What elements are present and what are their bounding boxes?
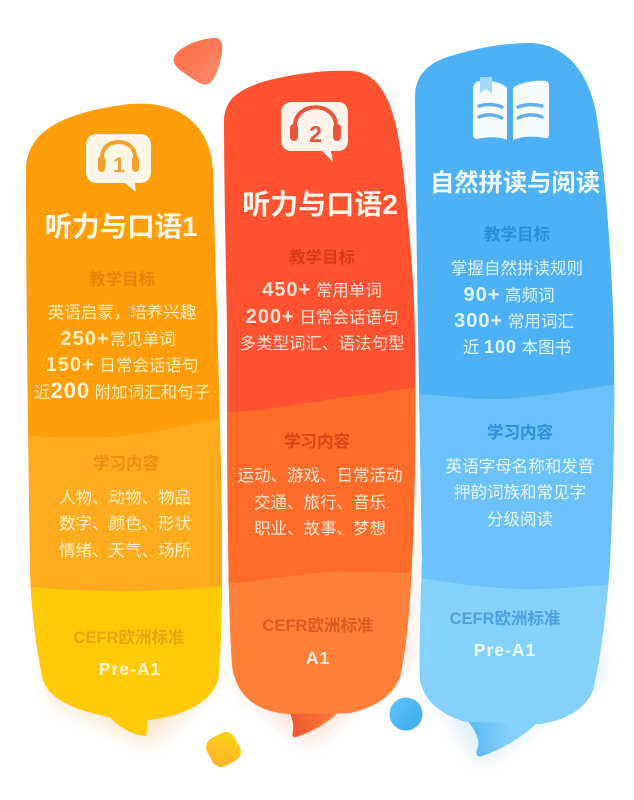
heading: CEFR standard: CEFR欧洲标准	[450, 608, 560, 628]
text block: learning content: 情绪、天气、场所	[59, 541, 191, 560]
text block: teaching goals: 450+ 常用单词	[262, 279, 382, 301]
level: Pre-A1: Pre-A1	[474, 640, 536, 660]
heading: teaching goals: 教学目标	[89, 269, 156, 289]
text block: learning content: 人物、动物、物品	[59, 488, 191, 507]
text block: teaching goals	[240, 279, 404, 353]
title: phonics and reading: 自然拼读与阅读	[430, 170, 600, 197]
heading: CEFR standard: CEFR欧洲标准	[74, 627, 184, 647]
icon: headphones 1	[86, 134, 151, 192]
panel: listening and speaking 2	[224, 70, 416, 748]
text block: teaching goals: 300+ 常用词汇	[454, 310, 574, 332]
text block: teaching goals: 近 100 本图书	[463, 337, 571, 357]
decoration: yellow rounded square	[203, 729, 244, 770]
text block: teaching goals: 近200 附加词汇和句子	[34, 378, 210, 403]
heading: CEFR standard: CEFR欧洲标准	[263, 615, 373, 635]
level: A1: A1	[306, 648, 330, 668]
heading: learning content: 学习内容	[284, 431, 350, 451]
speech bubble tail	[289, 710, 340, 737]
text block: learning content: 押韵词族和常见字	[454, 483, 586, 502]
text block: learning content: 数字、颜色、形状	[59, 514, 192, 533]
text block: teaching goals: 英语启蒙，培养兴趣	[48, 303, 196, 322]
text block: teaching goals: 200+ 日常会话语句	[246, 306, 398, 328]
text block: teaching goals: 多类型词汇、语法句型	[240, 334, 404, 353]
text block: teaching goals: 250+常见单词	[60, 328, 176, 350]
text block: learning content: 交通、旅行、音乐	[254, 493, 386, 512]
text block: teaching goals	[451, 259, 583, 357]
heading: teaching goals: 教学目标	[484, 224, 550, 244]
text block: teaching goals: 150+ 日常会话语句	[46, 354, 198, 376]
text block: learning content	[238, 466, 402, 538]
icon: open book	[473, 77, 549, 140]
speech bubble tail	[465, 718, 542, 756]
text block: learning content: 职业、故事、梦想	[254, 519, 386, 538]
decoration: coral teardrop	[174, 38, 222, 85]
text block: teaching goals	[34, 303, 210, 403]
text block: learning content: 分级阅读	[487, 510, 553, 529]
heading: teaching goals: 教学目标	[289, 247, 356, 267]
icon: headphones 2: 2	[309, 121, 322, 147]
level: Pre-A1: Pre-A1	[99, 659, 161, 679]
icon: headphones 2	[281, 102, 348, 162]
icon: headphones 1: 1	[113, 154, 125, 177]
text block: learning content	[446, 457, 594, 529]
title: listening and speaking 1: 听力与口语1	[45, 211, 197, 242]
heading: learning content: 学习内容	[487, 422, 554, 442]
text block: learning content: 运动、游戏、日常活动	[238, 466, 402, 485]
text block: learning content	[59, 488, 192, 560]
heading: learning content: 学习内容	[93, 453, 160, 473]
text block: teaching goals: 90+ 高频词	[463, 284, 555, 306]
panel: phonics and reading	[415, 43, 614, 764]
text block: teaching goals: 掌握自然拼读规则	[451, 259, 583, 278]
title: listening and speaking 2: 听力与口语2	[242, 189, 398, 220]
decoration: blue circle	[390, 698, 422, 730]
panel: listening and speaking 1	[26, 104, 222, 750]
text block: learning content: 英语字母名称和发音	[446, 457, 594, 476]
